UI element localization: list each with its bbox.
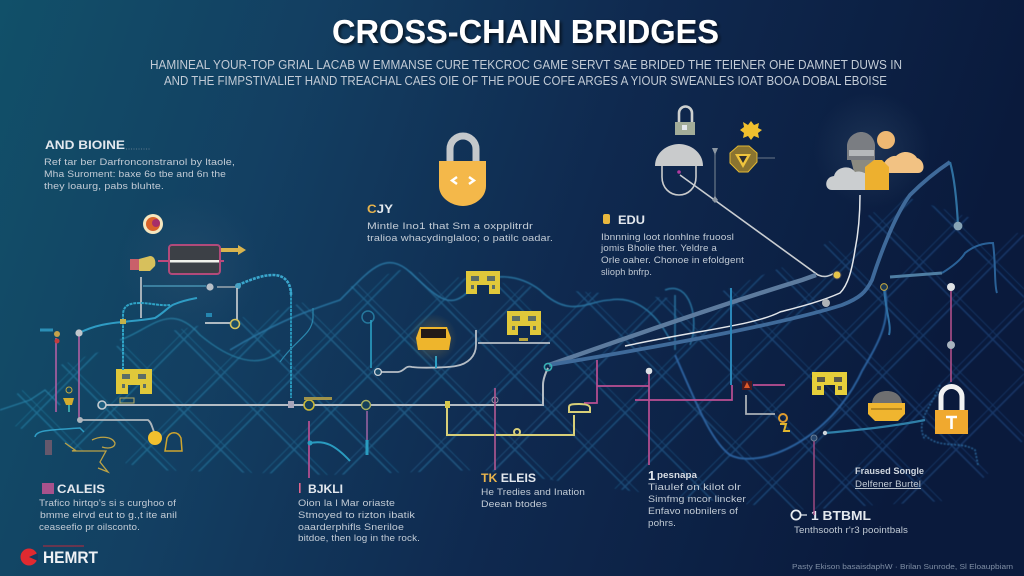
blue vertical link: [290, 290, 292, 398]
heading: Fraused Songle: [855, 466, 924, 477]
text block: [367, 221, 553, 244]
text block: [44, 157, 235, 192]
subtitle: [150, 58, 902, 88]
alert box: [742, 381, 752, 390]
main horizontal bus: [98, 363, 552, 410]
center link: [375, 330, 550, 375]
icon: gold lamp: [63, 387, 74, 412]
text block: ceaseefio pr oilsconto.: [39, 522, 140, 533]
text block: Oion la l Mar oriaste: [298, 498, 395, 509]
icon: right car: [868, 391, 905, 421]
text block: Orle oaher. Chonoe in efoldgent: [601, 255, 744, 266]
icon: small padlock: [675, 107, 695, 135]
panel: btbml: [791, 508, 908, 536]
panel: and bioine: [44, 140, 235, 192]
text block: Deean btodes: [481, 499, 547, 510]
icon: yellow arrow: [221, 245, 246, 255]
text block: slioph bnfrp.: [601, 267, 652, 278]
panel: fraused songle: [855, 466, 924, 490]
heading: EDU: [618, 215, 645, 227]
icon: right padlock: [935, 386, 968, 434]
upper left links: [79, 275, 291, 370]
text block: [648, 482, 746, 529]
text block: Stmoyed to rizton ibatik: [298, 510, 415, 521]
node: [811, 435, 817, 441]
panel: bjkli: [298, 483, 420, 544]
text block: oaarderphifls Sneriloe: [298, 522, 404, 533]
node: [646, 368, 652, 374]
text block: Tiaulef on kilot olr: [648, 482, 741, 493]
subtitle: AND THE FIMPSTIVALIET HAND TREACHAL CAES OIE OF THE POUE COFE ARGES A YIOUR SWEANLES IOAT BOOA DOBAL EBOISE: [164, 74, 887, 88]
title: CROSS-CHAIN BRIDGES: [332, 13, 719, 50]
gray elbow link: [746, 395, 775, 414]
text block: pohrs.: [648, 518, 676, 529]
heading: pesnapa: [657, 470, 698, 480]
text block: they loaurg, pabs bluhte.: [44, 181, 164, 192]
pink drop lines: [308, 388, 495, 478]
icon: gold gear: [148, 431, 182, 451]
icon: gold star: [740, 121, 762, 140]
icon: gold figure: [779, 414, 790, 431]
icon: bridge device cluster: [120, 195, 260, 335]
heading: CJY: [367, 204, 393, 216]
pink connector network: [584, 360, 785, 465]
text block: bitdoe, then log in the rock.: [298, 533, 420, 544]
heading: BJKLI: [308, 484, 343, 496]
pink callout line: [813, 440, 815, 515]
connector: shield to hub: [680, 175, 836, 276]
icon: dome shield: [655, 144, 703, 195]
dim branch: [280, 308, 313, 362]
text block: Mintle Ino1 that Sm a oxpplitrdr: [367, 221, 533, 232]
text block: jomis Bholie ther. Yeldre a: [600, 243, 718, 254]
panel: cjy: [367, 204, 553, 244]
heading: CALEIS: [57, 484, 105, 496]
text block: Mha Suroment: baxe 6o tbe and 6n the: [44, 169, 226, 180]
icon: chip building left: [116, 369, 152, 394]
heading: 1 BTBML: [811, 508, 871, 523]
icon: center car: [409, 314, 457, 362]
icon: chip device: [158, 245, 224, 274]
logo: [20, 546, 99, 567]
heading: AND BIOINE: [45, 140, 125, 152]
icon: gold badge: [730, 146, 775, 172]
logo: HEMRT: [43, 548, 99, 567]
text block: Ibnnning loot rlonhlne fruoosl: [601, 232, 734, 243]
text block: [39, 498, 177, 533]
background circuit grid: [0, 197, 1024, 510]
pink connector to lock: [947, 283, 955, 382]
ring riser: [362, 311, 374, 368]
icon: chip building middle: [507, 311, 541, 341]
text block: Delfener Burtel: [855, 479, 921, 490]
text block: [298, 498, 420, 544]
icon: cloud cluster: [814, 92, 930, 208]
text block: Tenthsooth r'r3 poointbals: [794, 525, 908, 536]
text block: [600, 232, 744, 278]
icon: right chip building: [812, 372, 847, 395]
text block: Enfavo nobnilers of: [648, 506, 738, 517]
text block: Simfmg mcor lincker: [648, 494, 746, 505]
text block: [481, 487, 585, 510]
left pink lines: [40, 329, 155, 434]
icon: signal pin: [712, 148, 718, 203]
icon: chip building top: [466, 271, 500, 294]
text block: He Tredies and Ination: [481, 487, 585, 498]
left squiggle glyphs: [35, 428, 115, 472]
right side blue links: [823, 243, 997, 435]
heading: [603, 214, 645, 227]
text block: tralioa whacydinglaloo; o patilc oadar.: [367, 233, 553, 244]
panel: caleis: [39, 483, 177, 533]
text block: Trafico hirtqo's si s curghoo of: [39, 498, 176, 509]
bridge beams: [549, 162, 962, 365]
heading: [648, 468, 698, 483]
connector: cloud to beam: [625, 195, 860, 346]
heading: 1: [648, 468, 655, 483]
heading: TK ELEIS: [481, 473, 536, 485]
blue riser: [730, 288, 732, 385]
text block: bmme elrvd eut to g.,t ite anil: [40, 510, 177, 521]
panel: pesnapa: [648, 468, 746, 529]
yellow pipe: [447, 403, 590, 435]
icon: red orb: [143, 214, 163, 234]
text block: Ref tar ber Darfronconstranol by ltaole,: [44, 157, 235, 168]
footer: Pasty Ekison basaisdaphW · Brilan Sunrode, Sl Eloaupbiam: [792, 564, 1013, 571]
panel: tk eleis: [481, 473, 585, 510]
icon: large padlock: [439, 136, 486, 206]
subtitle: HAMINEAL YOUR-TOP GRIAL LACAB W EMMANSE CURE TEKCROC GAME SERVT SAE BRIDED THE TEIENER OHE DAMNET DUWS IN: [150, 58, 902, 72]
icon: fist: [130, 256, 155, 271]
panel: edu: [600, 214, 744, 278]
